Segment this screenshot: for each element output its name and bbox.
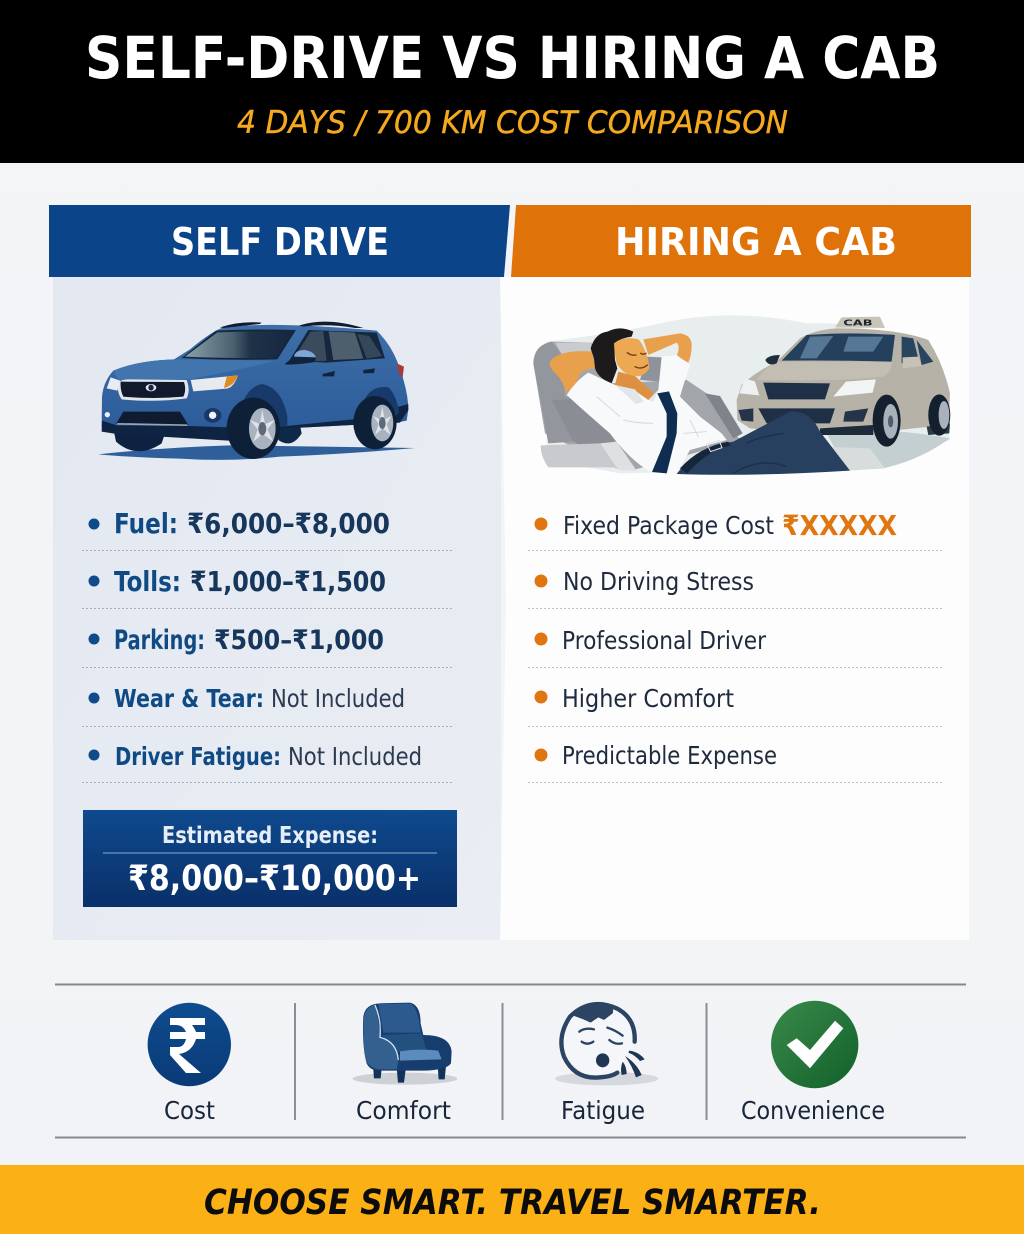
panel: comparison factors xyxy=(55,984,966,1138)
list item: tolls: ₹1,000–₹1,500 xyxy=(190,565,386,598)
label: convenience: Convenience xyxy=(741,1096,885,1125)
icon: relaxed passenger and taxi xyxy=(533,315,950,475)
icon: tired face xyxy=(555,1003,658,1085)
factor: comfort xyxy=(353,1003,457,1125)
callout: estimated expense: ₹8,000–₹10,000+ xyxy=(128,859,421,899)
icon: blue SUV xyxy=(98,322,415,460)
list item: fuel xyxy=(88,507,390,540)
list item: wear and tear: Wear & Tear: xyxy=(114,684,264,713)
list item: fuel: Fuel: xyxy=(114,507,178,540)
icon: armchair xyxy=(353,1003,457,1085)
seat xyxy=(533,342,743,471)
callout: estimated expense xyxy=(83,810,457,907)
heading: self drive xyxy=(49,205,510,277)
list: cab benefits xyxy=(528,509,943,782)
factor: cost xyxy=(148,1003,231,1125)
list item: driver fatigue xyxy=(88,742,422,771)
list item: wear and tear xyxy=(88,684,405,713)
icon: rupee coin xyxy=(148,1003,231,1086)
list item: fuel: ₹6,000–₹8,000 xyxy=(187,507,390,540)
panel: self drive xyxy=(49,205,510,940)
list item: parking: ₹500–₹1,000 xyxy=(214,625,384,656)
list item: driver fatigue: Not Included xyxy=(288,742,422,771)
list item: wear and tear: Not Included xyxy=(271,684,405,713)
panel: hiring a cab xyxy=(500,205,971,940)
footer banner: CHOOSE SMART. TRAVEL SMARTER. xyxy=(204,1183,821,1223)
taxi: CAB xyxy=(843,318,873,328)
list item: fixed package cost: ₹XXXXX xyxy=(782,509,897,542)
list item: professional driver: Professional Driver xyxy=(562,626,767,655)
footer banner xyxy=(0,1165,1024,1234)
taxi xyxy=(737,317,950,447)
list item: fixed package cost xyxy=(534,509,897,542)
subtitle: 4 DAYS / 700 KM COST COMPARISON xyxy=(237,105,788,141)
heading: hiring a cab xyxy=(511,205,971,277)
title banner xyxy=(0,0,1024,163)
list item: fixed package cost: Fixed Package Cost xyxy=(563,511,774,540)
list item: higher comfort: Higher Comfort xyxy=(562,684,734,713)
heading: hiring a cab: HIRING A CAB xyxy=(615,220,897,264)
list item: no driving stress: No Driving Stress xyxy=(563,567,754,596)
list item: predictable expense: Predictable Expense xyxy=(562,741,777,770)
list item: tolls xyxy=(88,565,386,598)
list item: parking: Parking: xyxy=(114,625,205,656)
list item: parking xyxy=(88,625,384,656)
factor: fatigue xyxy=(555,1003,658,1125)
man xyxy=(549,328,850,475)
list item: tolls: Tolls: xyxy=(114,565,181,598)
label: fatigue: Fatigue xyxy=(561,1096,645,1125)
label: cost: Cost xyxy=(164,1096,215,1125)
factor: convenience xyxy=(741,1001,885,1125)
list: self drive costs xyxy=(82,507,453,782)
callout: estimated expense: Estimated Expense: xyxy=(162,823,378,849)
title: SELF-DRIVE VS HIRING A CAB xyxy=(85,24,940,92)
icon: green check xyxy=(771,1001,858,1088)
label: comfort: Comfort xyxy=(356,1096,451,1125)
list item: driver fatigue: Driver Fatigue: xyxy=(115,742,281,771)
heading: self drive: SELF DRIVE xyxy=(171,220,389,264)
